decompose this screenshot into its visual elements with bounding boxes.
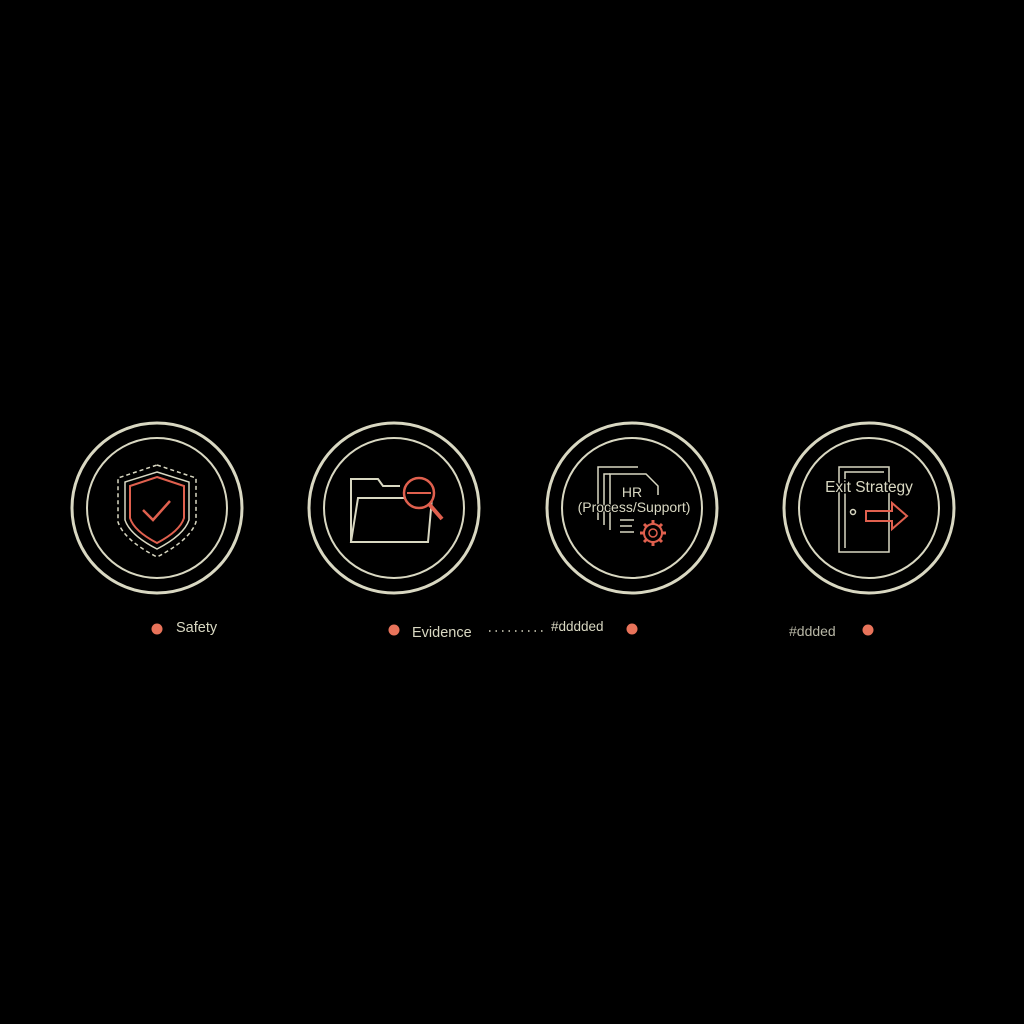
- panel: HR: [547, 423, 717, 634]
- text: HR: HR: [622, 484, 642, 500]
- label: exit: [789, 623, 874, 639]
- label: exit: #ddded: [789, 623, 836, 639]
- label: evidence: Evidence: [412, 625, 472, 641]
- label: evidence: [388, 624, 546, 641]
- panel: safety: [72, 423, 242, 636]
- text: process/support: (Process/Support): [578, 499, 690, 515]
- panel: exit strategy: [784, 423, 954, 639]
- label: hr: [551, 619, 638, 634]
- label: hr: #dddded: [551, 619, 604, 634]
- icon: door with arrow: [839, 467, 907, 552]
- panel: evidence: [309, 423, 546, 641]
- label: safety: [152, 620, 218, 636]
- icon: folder with magnifier: [351, 478, 442, 542]
- label: safety: Safety: [176, 620, 218, 636]
- icon: documents with gear: [598, 467, 666, 546]
- text: exit strategy: Exit Strategy: [825, 479, 913, 496]
- icon: shield: [118, 465, 196, 557]
